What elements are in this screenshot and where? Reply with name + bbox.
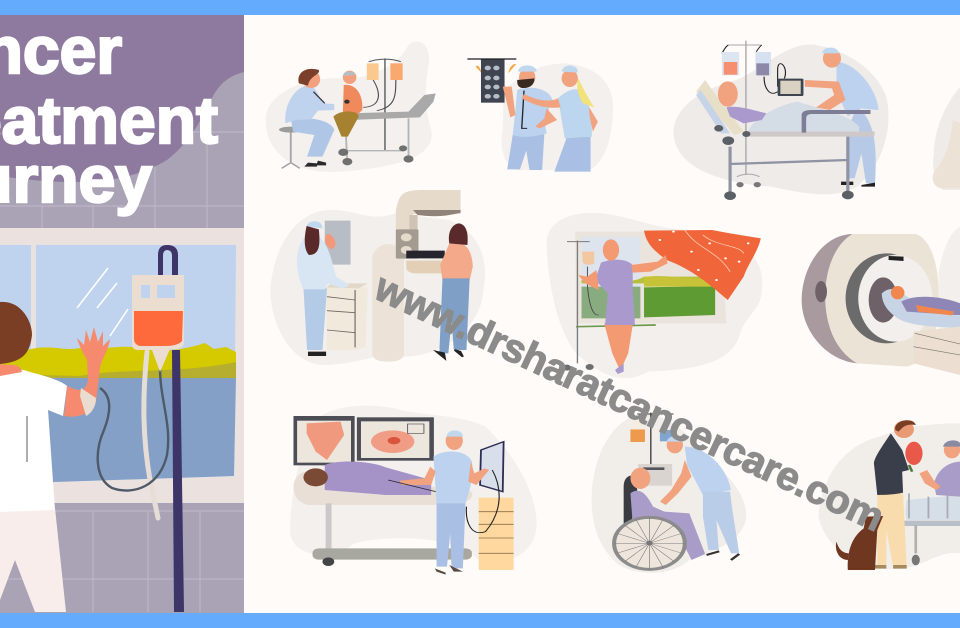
top blue band <box>0 0 960 15</box>
purple title blob <box>0 15 244 182</box>
watermark: www.drsharatcancercare.com <box>367 265 891 540</box>
row 3 <box>290 406 960 575</box>
scene: MRI scanner <box>802 227 960 375</box>
window <box>0 228 244 503</box>
bottom blue band <box>0 613 960 628</box>
title <box>0 36 218 217</box>
patient from behind <box>0 302 110 612</box>
scene: endoscopy <box>290 406 537 575</box>
scene: mammography <box>270 190 485 365</box>
white content panel edge <box>244 15 960 613</box>
scene: patient at window with curtain <box>546 213 762 378</box>
IV tubes <box>98 352 168 518</box>
scene: nurse at bedside with IV <box>673 41 888 200</box>
scene: patient in wheelchair <box>592 413 746 573</box>
row 1 <box>266 41 960 200</box>
scene: doctor examining child <box>266 41 436 172</box>
panel: left hospital window poster <box>0 13 244 613</box>
IV bag <box>132 275 184 372</box>
scene: visitor with flowers and dog <box>818 420 960 570</box>
IV pole <box>158 245 184 612</box>
scene: doctors reviewing scan <box>467 59 613 172</box>
scene: partially visible patient and cat <box>933 87 960 190</box>
row 2 <box>270 190 960 378</box>
